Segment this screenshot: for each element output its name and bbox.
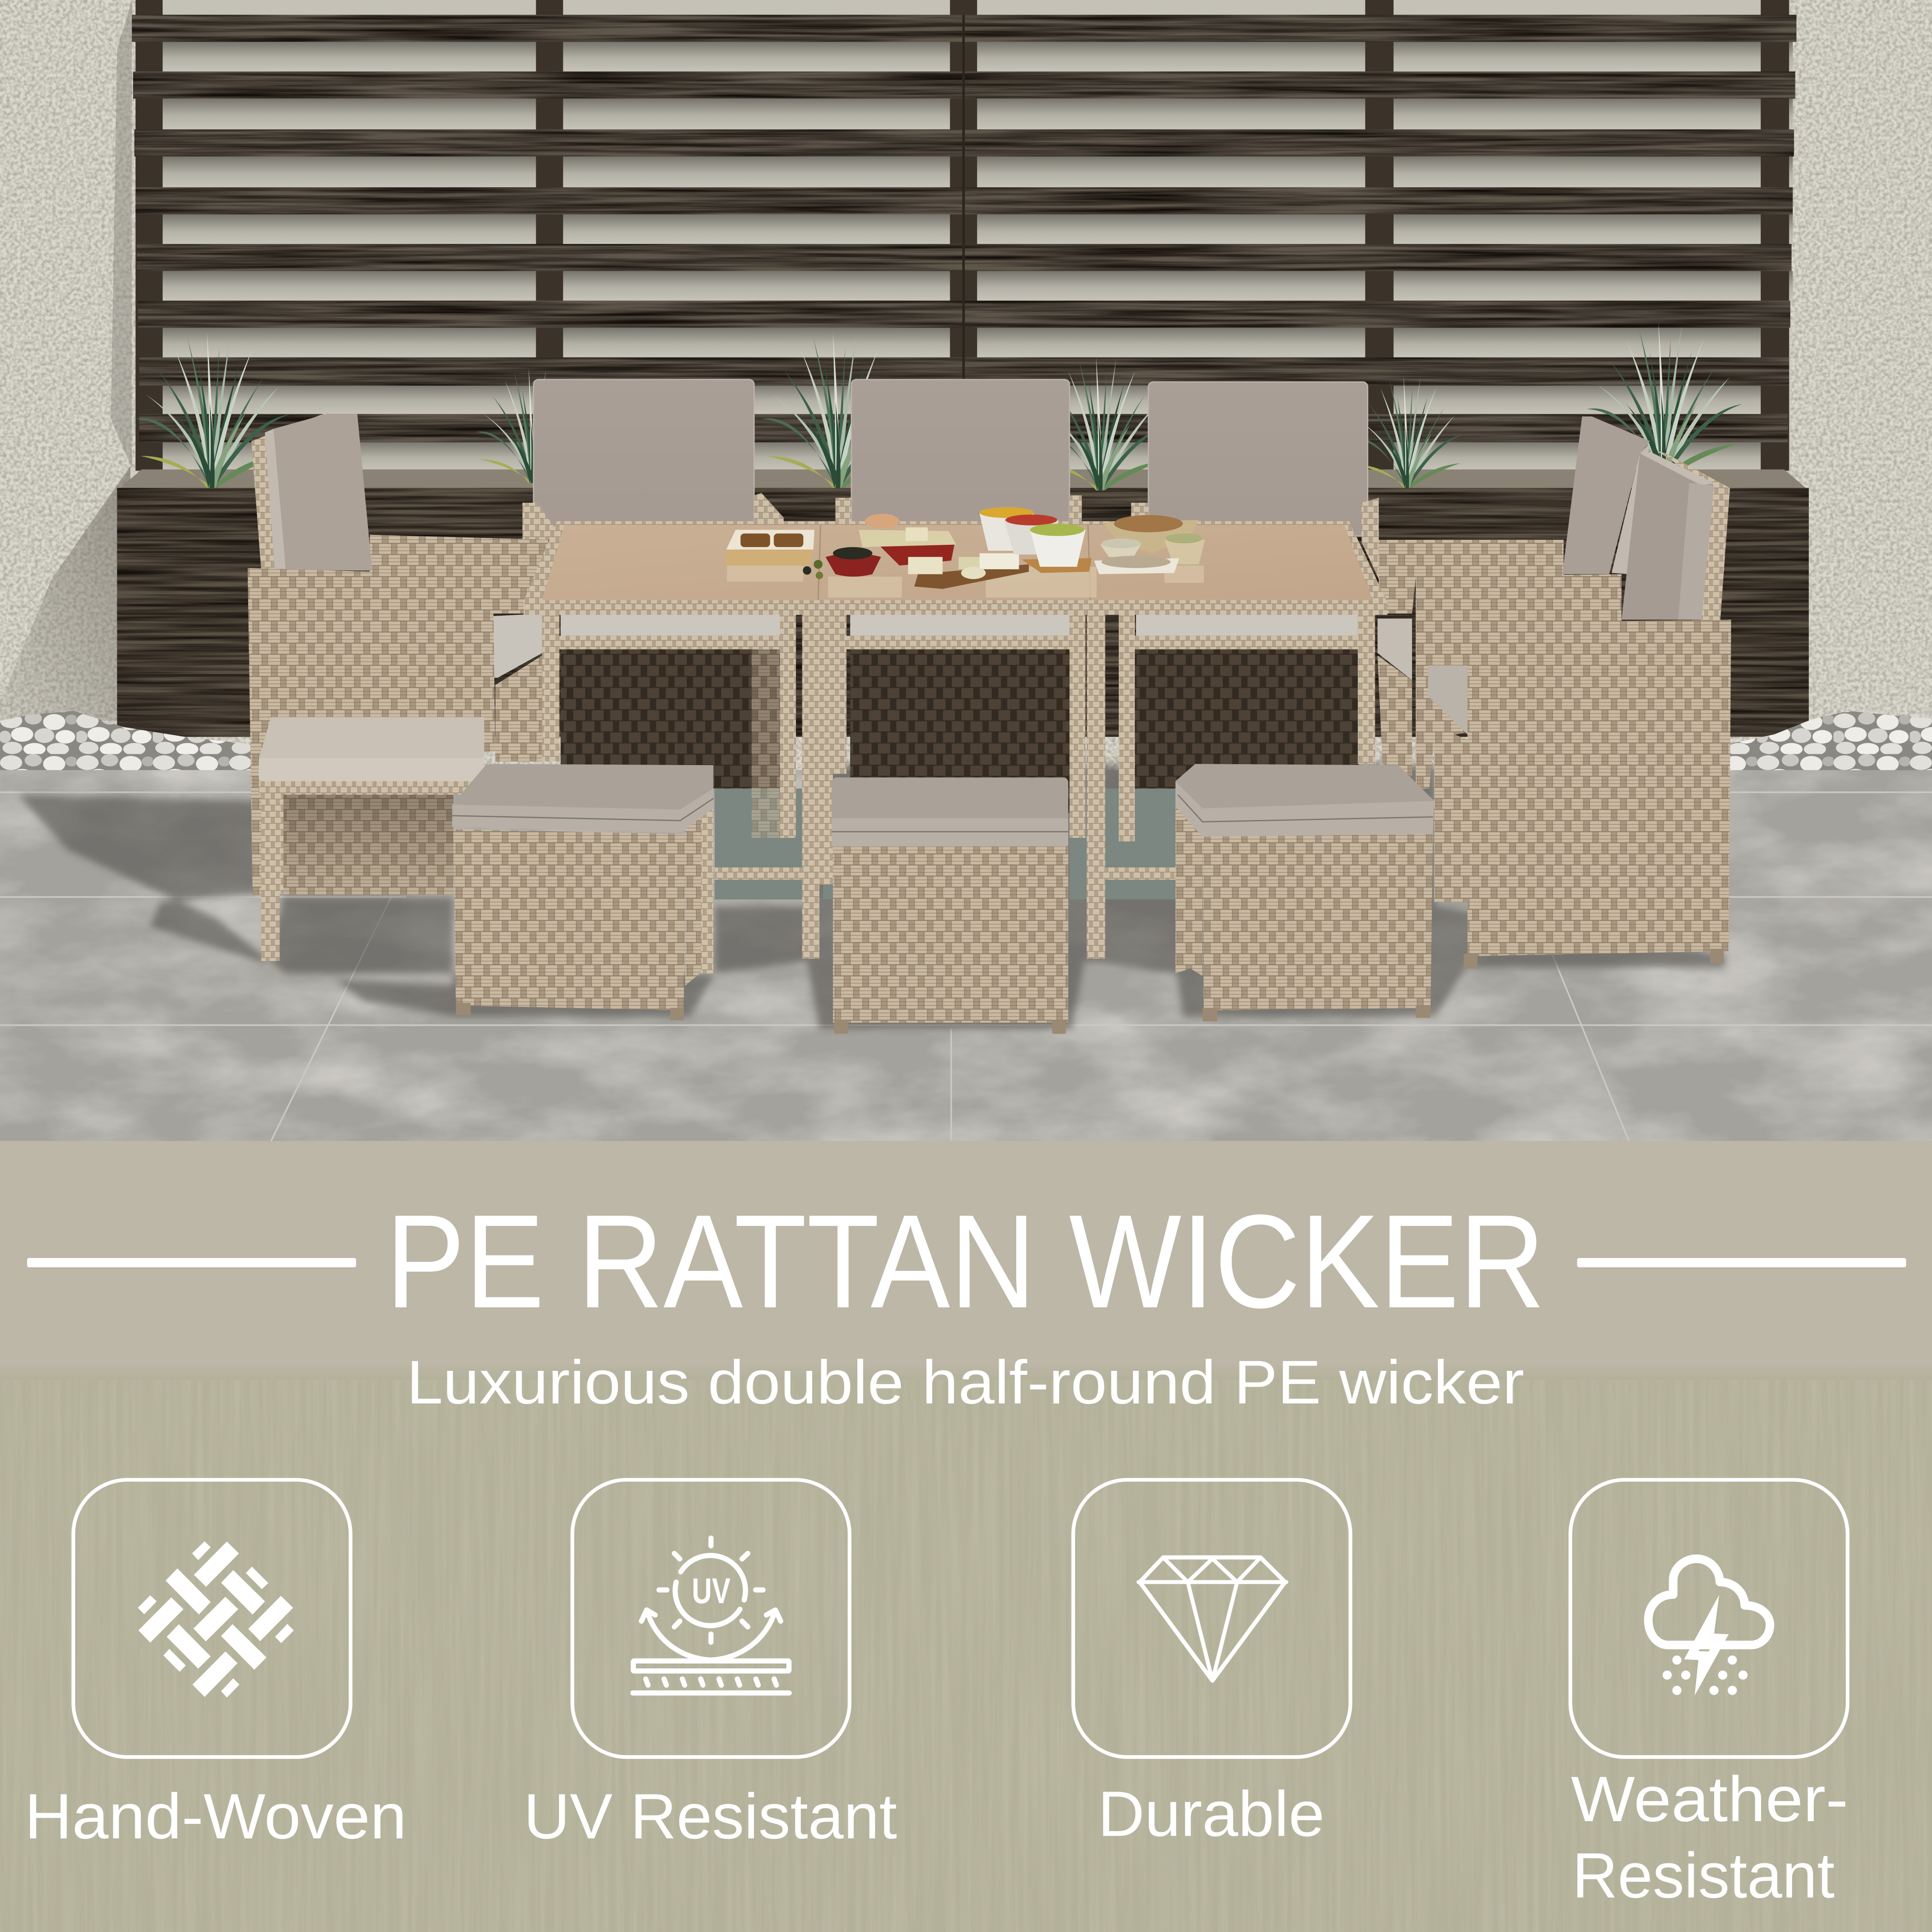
stool right (1176, 764, 1434, 1021)
icon: woven pattern (138, 1541, 294, 1698)
red dish with cheese (859, 514, 956, 565)
side panel (1176, 801, 1203, 976)
label: Weather- (1571, 1763, 1848, 1835)
table legs (542, 614, 1375, 959)
glass top (542, 525, 1373, 600)
table (524, 507, 1388, 959)
feature: hand-woven (24, 1480, 407, 1852)
food (726, 507, 1205, 598)
front chair feet (1464, 949, 1724, 969)
pebbles left (0, 711, 251, 772)
label: Resistant (1572, 1840, 1835, 1911)
far side seat left (493, 614, 542, 677)
reflections on glass (727, 564, 1204, 598)
front chair frame (1700, 486, 1730, 623)
sauce bowls (980, 507, 1092, 573)
right chairs (1416, 416, 1731, 969)
far side lower panel left (495, 656, 542, 762)
seat rail (259, 779, 486, 795)
icon box (1571, 1480, 1847, 1757)
wooden slatted trellis (132, 0, 1796, 493)
seat cushion (259, 717, 484, 781)
icon box (73, 1480, 350, 1757)
label: UV Resistant (524, 1780, 897, 1852)
back cushion (265, 414, 372, 571)
label: Durable (1098, 1778, 1324, 1850)
chair legs (261, 789, 283, 961)
wall (0, 0, 1932, 776)
stone floor (0, 770, 1932, 1141)
table seats visible beneath (561, 614, 1358, 636)
far side arm right (1379, 540, 1564, 614)
furniture: back row chairs and under-table (370, 380, 1564, 899)
wooden tray of nuts (726, 530, 814, 565)
plants (136, 323, 1742, 490)
title rule right (1577, 1258, 1906, 1267)
chair arm stubs (522, 493, 1379, 579)
front chair cushion (1622, 452, 1714, 620)
icon: uv sun over material (633, 1538, 789, 1693)
mid arm panel (1416, 574, 1622, 789)
rear chair back (1562, 416, 1650, 574)
side wicker panel (248, 568, 495, 895)
feet (834, 1020, 1066, 1034)
olive bowl (803, 547, 881, 579)
far side seat right (1378, 619, 1412, 680)
table frame (524, 521, 1388, 615)
front chair side panel (1467, 620, 1731, 956)
cushion (832, 778, 1068, 847)
label (1571, 1763, 1848, 1911)
left chair (248, 413, 495, 961)
icon: uv sun over material: UV (692, 1571, 730, 1611)
title rule left (27, 1258, 356, 1267)
icon: diamond (1139, 1558, 1286, 1681)
seat back lower panel (281, 792, 453, 895)
dark chair backs under table (561, 643, 1359, 899)
floor shadows (18, 764, 1725, 1029)
back frame (251, 413, 333, 571)
icon: storm cloud (1648, 1559, 1770, 1695)
front panel (1203, 832, 1433, 1010)
title: PE RATTAN WICKER (386, 1187, 1545, 1336)
icon box (572, 1480, 850, 1757)
photo: patio background (0, 0, 1932, 1141)
chair rails beneath table (557, 636, 1360, 649)
feature: durable (1073, 1480, 1350, 1850)
feature: uv resistant (524, 1480, 897, 1852)
icon box (1073, 1480, 1350, 1757)
feet (1203, 1005, 1431, 1021)
stool centre (832, 778, 1068, 1034)
stool left (452, 764, 714, 1020)
cushion (1176, 764, 1434, 837)
pebbles right (1728, 711, 1932, 774)
back chair cushions (534, 380, 1368, 536)
cheese board (908, 553, 1029, 589)
rear seat cushion (1428, 665, 1467, 734)
side panel (685, 795, 714, 986)
info panel background (0, 1141, 1932, 1932)
front panel (453, 829, 685, 1010)
cushion (452, 764, 714, 833)
far side arm left (370, 535, 548, 614)
feature: weather-resistant (1571, 1480, 1848, 1911)
rear lower panel (1434, 727, 1467, 902)
far side lower panel right (1378, 656, 1412, 776)
feet (456, 1003, 684, 1020)
front panel (833, 845, 1068, 1023)
label: Hand-Woven (24, 1780, 407, 1852)
snack basket and bowls (1094, 515, 1205, 574)
planter box (117, 469, 1809, 737)
subtitle: Luxurious double half-round PE wicker (407, 1348, 1524, 1417)
